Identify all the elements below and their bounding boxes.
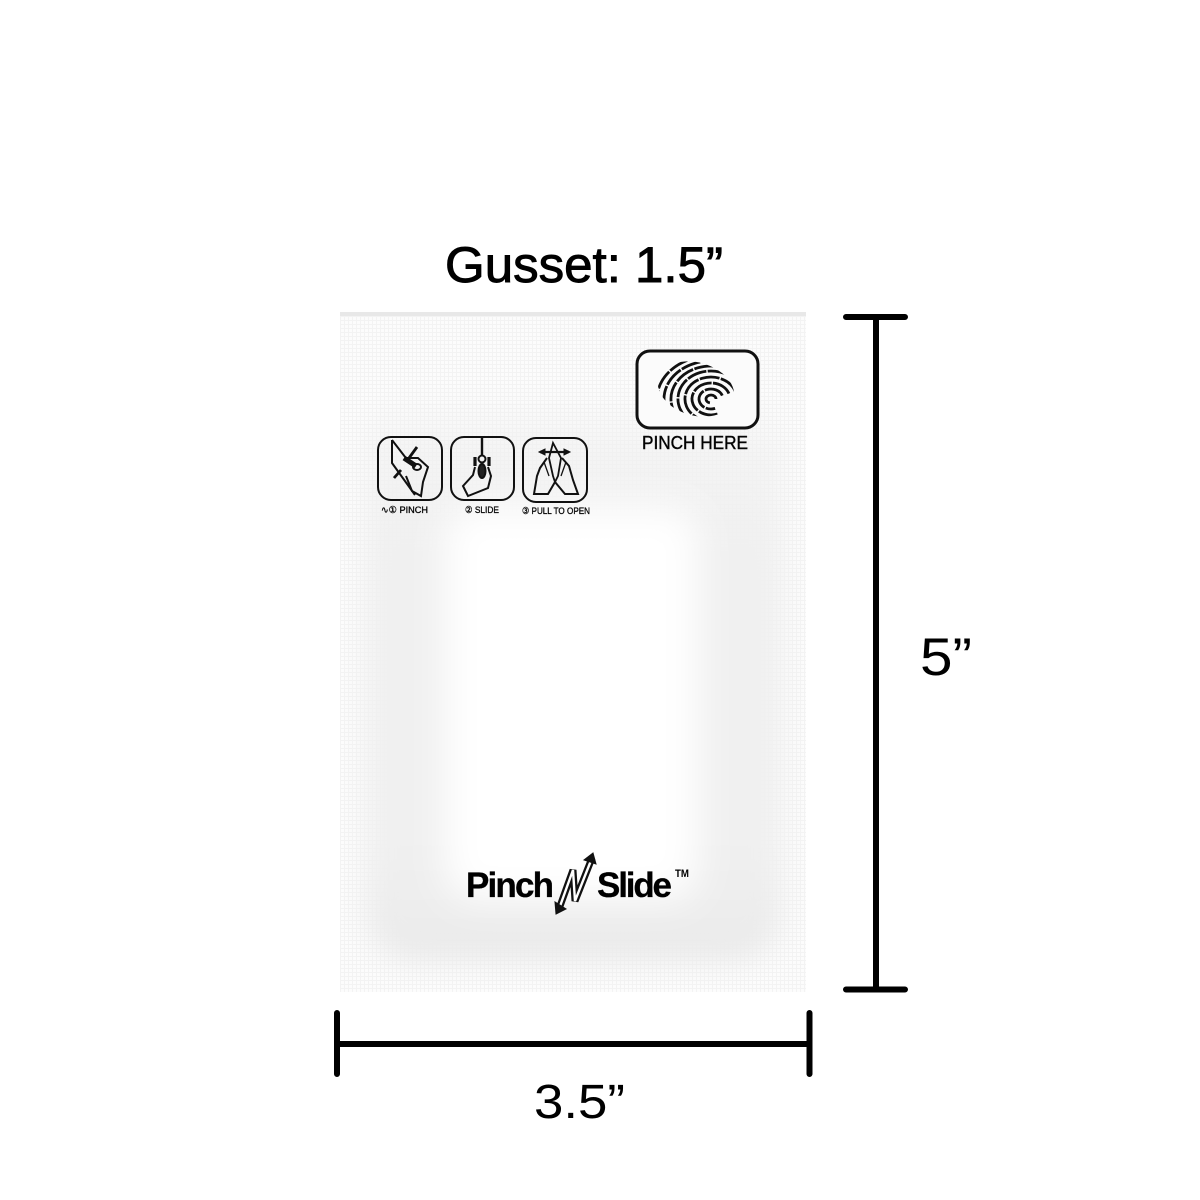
panel: pouch (340, 312, 806, 992)
infographic canvas (334, 246, 970, 1118)
label: step 1: ∿① PINCH (381, 505, 428, 516)
label: height: 5” (920, 628, 972, 687)
icon: step 2 slide (451, 437, 514, 500)
logo word: Pinch: Pinch (466, 866, 554, 905)
label: pinch here: PINCH HERE (642, 433, 748, 453)
heading: gusset size: Gusset: 1.5” (445, 237, 723, 293)
label: step 2: ② SLIDE (465, 505, 499, 516)
logo trademark: TM (675, 868, 689, 880)
label: width: 3.5” (534, 1076, 625, 1129)
label: step 3: ③ PULL TO OPEN (522, 506, 590, 517)
icon: pinch here fingerprint (636, 350, 760, 430)
arrow: height dimension (846, 317, 905, 990)
arrow: width dimension (337, 1013, 810, 1074)
logo word: Slide: Slide (597, 866, 672, 905)
logo icon: N arrow (555, 853, 596, 914)
icon: step 1 pinch (378, 437, 442, 500)
icon: step 3 pull to open (523, 438, 587, 502)
logo: Pinch N Slide (466, 853, 689, 914)
